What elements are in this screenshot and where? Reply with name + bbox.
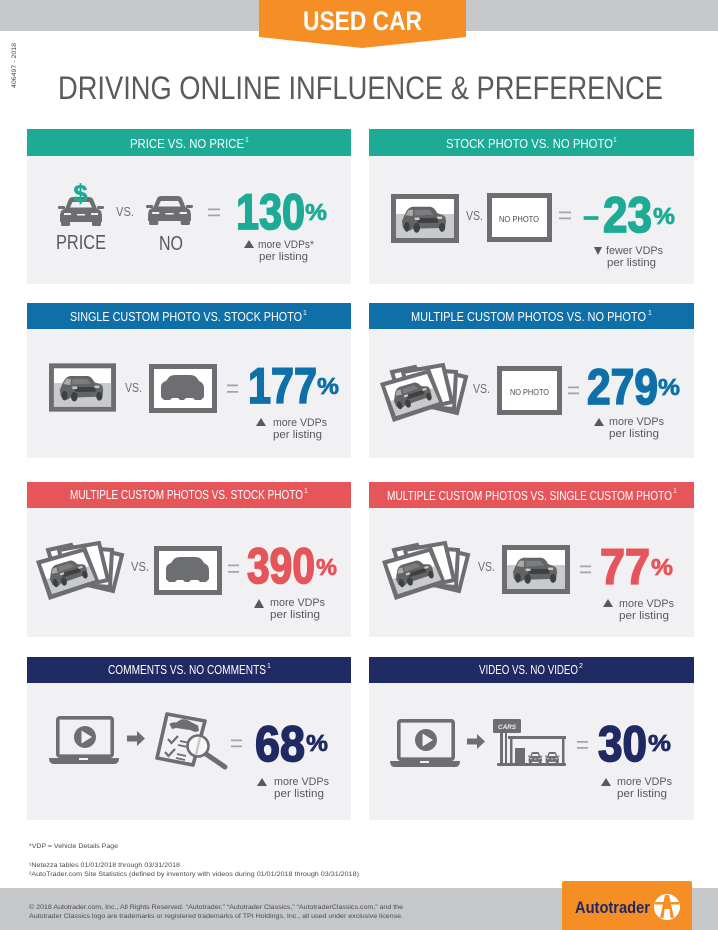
stat: -23% [584, 187, 675, 243]
vs label: VS. [125, 380, 142, 395]
equals sign [580, 566, 591, 573]
stat: 279%: % [658, 374, 680, 400]
stat: 177%: % [317, 373, 339, 399]
heading: video vs no video: VIDEO VS. NO VIDEO [479, 662, 578, 677]
caption: more VDPs per listing: per listing [273, 429, 322, 441]
heading: multiple custom photos vs single custom photo [369, 482, 694, 508]
footnotes: ²AutoTrader.com Site Statistics (defined by inventory with videos during 01/01/2018 through 03/31/2018) [29, 871, 359, 878]
heading: multiple custom photos vs stock photo [27, 482, 351, 508]
icon: stock photo [391, 194, 459, 243]
legal text: Autotrader Classics logo are trademarks or registered trademarks of TPI Holdings, Inc., all used under exclusive license. [29, 913, 403, 920]
heading: single custom photo vs stock photo: 1 [303, 310, 307, 317]
heading: stock photo vs no photo: STOCK PHOTO VS. NO PHOTO [446, 136, 613, 151]
stat: 68%: 68 [255, 716, 305, 772]
caption: more VDPs per listing: more VDPs [609, 416, 664, 428]
vs label: VS. [466, 208, 483, 223]
stat: -23%: 23 [603, 187, 652, 243]
panel: video vs no video [369, 657, 694, 820]
icon: car dealership: CARS [498, 724, 517, 731]
equals sign [559, 212, 571, 219]
caption: more VDPs per listing [601, 776, 672, 800]
heading: single custom photo vs stock photo [27, 303, 351, 329]
stat: 77%: % [651, 554, 673, 580]
caption: fewer VDPs per listing: per listing [607, 257, 656, 269]
equals sign [228, 564, 239, 573]
caption: more VDPs per listing: per listing [274, 788, 324, 800]
heading: multiple custom photos vs no photo: MULTIPLE CUSTOM PHOTOS VS. NO PHOTO [411, 309, 646, 324]
panel: multiple custom photos vs no photo [369, 303, 694, 458]
stat: 390%: 390 [247, 538, 315, 594]
caption: more VDPs per listing: per listing [617, 788, 667, 800]
icon: car with price: $ [74, 180, 88, 208]
heading: video vs no video [369, 657, 694, 683]
icon: photo stack [380, 365, 466, 422]
equals sign [568, 386, 579, 394]
caption: more VDPs per listing [256, 417, 327, 441]
icon: car with price: PRICE [56, 232, 106, 254]
caption: more VDPs per listing [257, 776, 329, 800]
icon: laptop with play button [390, 721, 460, 767]
icon: laptop with play button [49, 718, 119, 764]
vs label: VS. [116, 204, 134, 219]
heading: single custom photo vs stock photo: SINGLE CUSTOM PHOTO VS. STOCK PHOTO [70, 309, 302, 324]
heading: comments vs no comments: 1 [267, 663, 271, 670]
heading: price vs no price: PRICE VS. NO PRICE [130, 136, 244, 151]
stat: 77%: 77 [600, 539, 650, 595]
panel: comments vs no comments [27, 657, 351, 820]
icon: no photo frame: NO PHOTO [510, 388, 549, 397]
legal text [29, 903, 403, 920]
stat: 68%: % [306, 730, 328, 756]
panel: stock photo vs no photo [369, 129, 694, 284]
stat: 130%: 130 [236, 184, 305, 240]
icon: comment checklist with magnifier [157, 714, 225, 767]
icon: custom photo [49, 363, 116, 412]
caption: more VDPs per listing: per listing [619, 610, 669, 622]
caption: more VDPs per listing [603, 598, 674, 622]
panel: multiple custom photos vs stock photo [27, 482, 351, 637]
banner: used car [259, 0, 466, 48]
icon: photo stack [36, 543, 122, 600]
stat: 390%: % [316, 554, 337, 580]
icon: stock photo silhouette [149, 364, 217, 413]
heading: price vs no price [27, 129, 351, 156]
vs label: VS. [473, 381, 490, 396]
logo: Autotrader [562, 881, 692, 930]
equals sign [227, 384, 238, 393]
caption: more VDPs per listing: more VDPs [617, 776, 672, 788]
footer band [0, 888, 718, 930]
heading: comments vs no comments: COMMENTS VS. NO COMMENTS [108, 662, 266, 677]
icon: photo stack [382, 543, 468, 600]
stat: 30%: 30 [598, 716, 647, 772]
heading: video vs no video: 2 [579, 663, 583, 670]
heading: multiple custom photos vs no photo: 1 [648, 310, 652, 317]
heading: multiple custom photos vs no photo [369, 303, 694, 329]
caption: more VDPs per listing [254, 597, 325, 621]
panel: multiple custom photos vs single custom photo [369, 482, 694, 637]
equals sign [208, 208, 220, 216]
heading: stock photo vs no photo: 1 [613, 137, 617, 144]
equals sign [577, 741, 588, 749]
icon: no photo frame [497, 366, 562, 415]
arrow [127, 731, 145, 746]
icon: car without price [146, 196, 193, 255]
heading: multiple custom photos vs stock photo: 1 [304, 488, 308, 495]
stat: 279%: 279 [587, 359, 658, 415]
icon: custom photo [502, 545, 570, 594]
heading: multiple custom photos vs single custom photo: 1 [673, 488, 677, 495]
icon: car without price: NO [159, 233, 183, 255]
icon: no photo frame [487, 193, 552, 242]
stat: 30%: % [648, 730, 671, 756]
vs label: VS. [478, 559, 495, 574]
caption: more VDPs per listing [594, 416, 664, 440]
heading: stock photo vs no photo [369, 129, 694, 156]
caption: more VDPs per listing: per listing [270, 609, 320, 621]
footnotes: *VDP = Vehicle Details Page [29, 843, 118, 850]
banner: used car: USED CAR [303, 6, 422, 36]
icon: stock photo silhouette [154, 546, 222, 595]
vs label: VS. [131, 559, 149, 574]
caption: fewer VDPs per listing: fewer VDPs [606, 245, 663, 257]
top header band [0, 0, 718, 31]
stat: 130%: % [305, 199, 327, 225]
caption: more VDPs per listing: more VDPs* [258, 239, 315, 251]
stat: 177%: 177 [248, 358, 317, 414]
icon: no photo frame: NO PHOTO [499, 215, 539, 224]
caption: more VDPs per listing: more VDPs [619, 598, 674, 610]
caption: more VDPs per listing: per listing [259, 251, 308, 263]
caption: more VDPs per listing: more VDPs [273, 417, 327, 429]
footnotes [29, 843, 359, 878]
footnotes: ¹Netezza tables 01/01/2018 through 03/31/2018 [29, 862, 180, 869]
caption: more VDPs per listing [244, 239, 315, 263]
icon: car with price [56, 180, 106, 254]
legal text: © 2018 Autotrader.com, Inc., All Rights Reserved. “Autotrader,” “Autotrader Classics,” “AutotraderClassics.com,” and the [29, 903, 403, 911]
caption: more VDPs per listing: more VDPs [274, 776, 329, 788]
caption: more VDPs per listing: more VDPs [270, 597, 325, 609]
icon: car dealership [493, 719, 566, 766]
panel: price vs no price [27, 129, 351, 284]
side job code: 406497 - 2018 [12, 42, 18, 88]
caption: fewer VDPs per listing [594, 245, 663, 269]
panel: single custom photo vs stock photo [27, 303, 351, 458]
heading: price vs no price: 1 [245, 137, 249, 144]
heading: multiple custom photos vs stock photo: MULTIPLE CUSTOM PHOTOS VS. STOCK PHOTO [70, 487, 303, 502]
arrow [467, 734, 485, 749]
equals sign [231, 740, 242, 747]
caption: more VDPs per listing: per listing [609, 428, 659, 440]
logo: Autotrader: Autotrader [575, 899, 651, 917]
stat: -23%: % [653, 203, 675, 229]
heading: comments vs no comments [27, 657, 351, 683]
